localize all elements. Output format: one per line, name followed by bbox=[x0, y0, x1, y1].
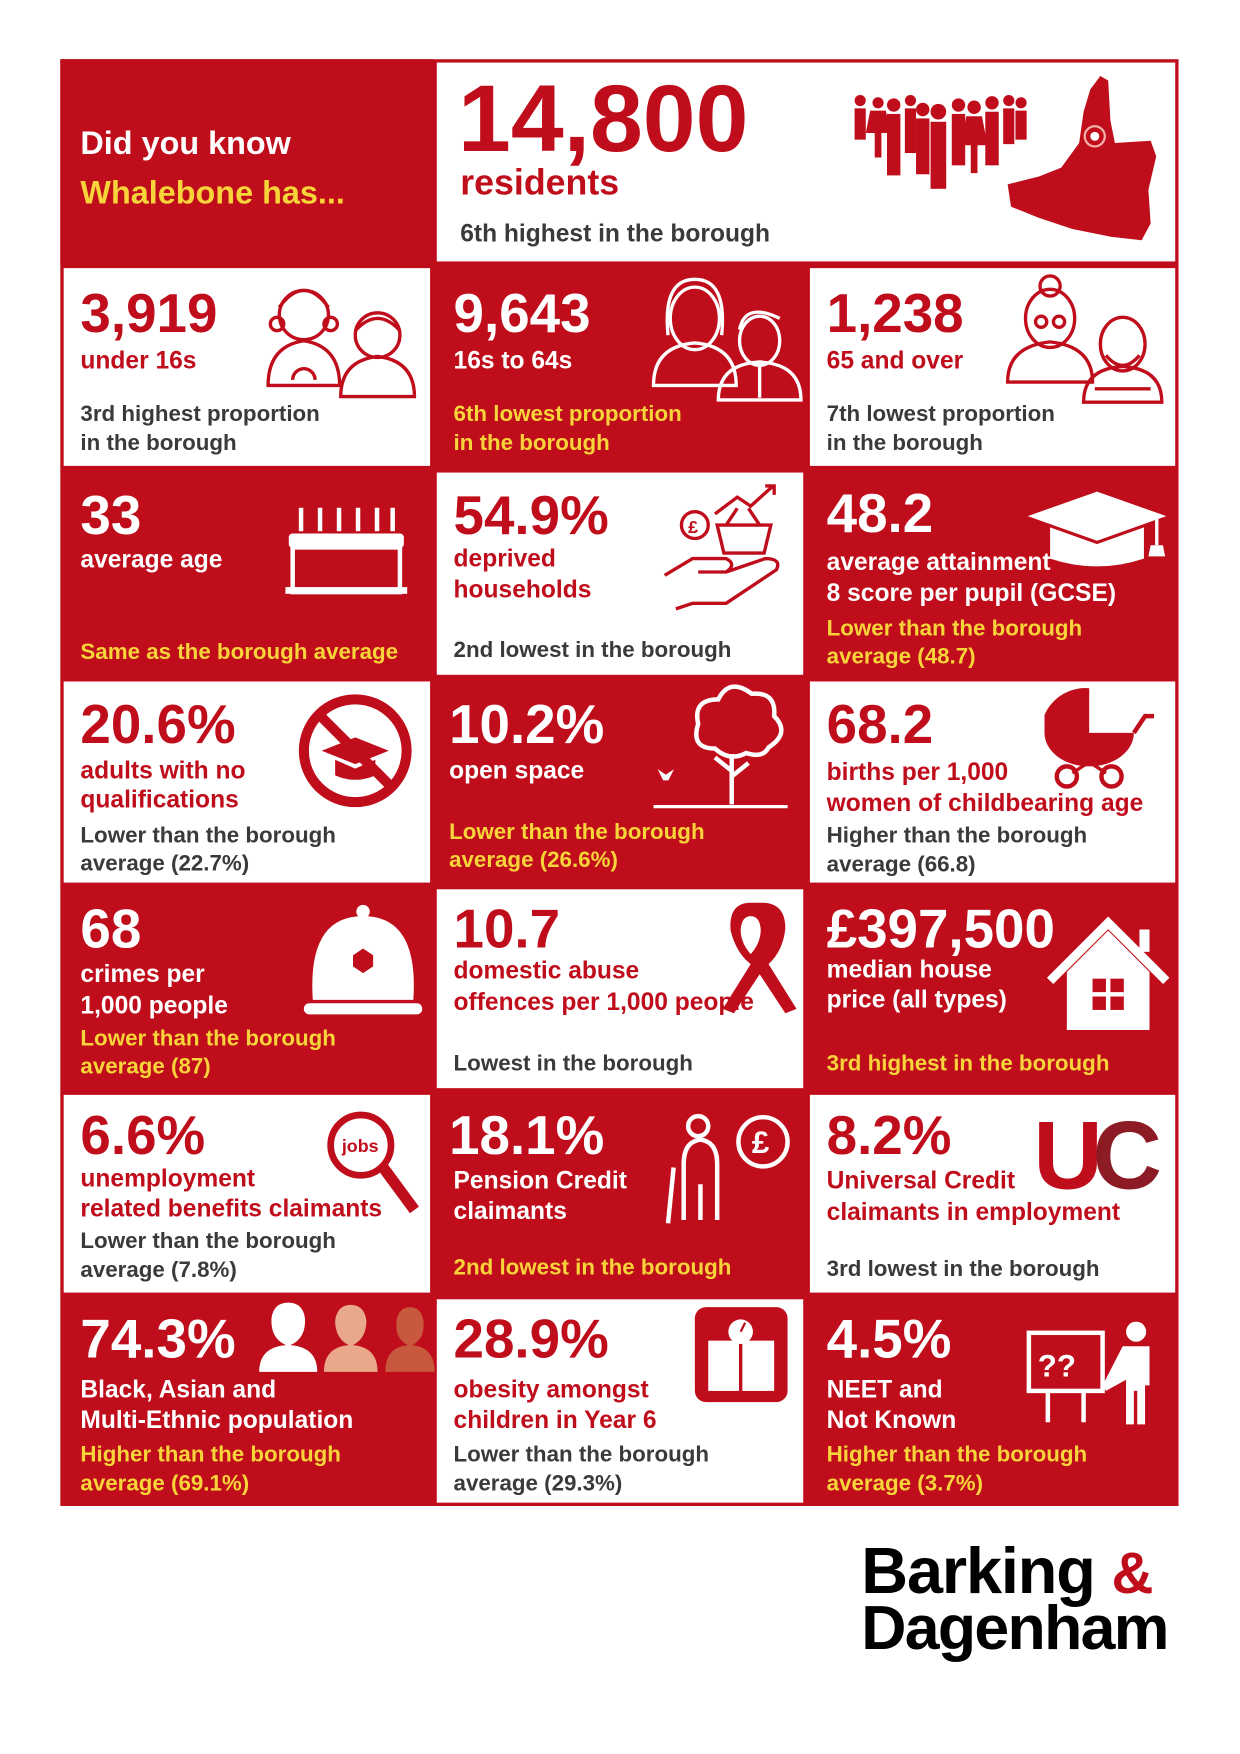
icon: ribbon bbox=[723, 903, 797, 1013]
panel: residents: 14,800 bbox=[458, 66, 748, 172]
panel: crimes bbox=[80, 897, 422, 1079]
panel: domestic abuse: Lowest in the borough bbox=[454, 1050, 693, 1075]
panel: attainment 8 bbox=[827, 482, 1166, 669]
panel: average age: 33 bbox=[80, 484, 141, 546]
panel: domestic abuse: domestic abuse bbox=[454, 958, 639, 985]
panel: crimes: Lower than the borough bbox=[80, 1026, 336, 1051]
panel: ethnicity bbox=[80, 1303, 435, 1495]
panel: no qualifications: Lower than the borough bbox=[80, 822, 336, 847]
panel: deprived households bbox=[437, 473, 803, 675]
panel: average age: Same as the borough average bbox=[80, 639, 398, 664]
panel: no qualifications: adults with no bbox=[80, 758, 246, 785]
icon: house bbox=[1050, 923, 1166, 1030]
icon: basket in hand: £ bbox=[688, 517, 698, 537]
panel: crimes: 1,000 people bbox=[80, 992, 228, 1019]
panel: unemployment: unemployment bbox=[80, 1165, 255, 1192]
panel: unemployment: average (7.8%) bbox=[80, 1257, 237, 1282]
panel: 16s to 64s bbox=[454, 279, 801, 455]
panel: pension credit: claimants bbox=[454, 1198, 567, 1225]
panel: unemployment: Lower than the borough bbox=[80, 1228, 336, 1253]
panel: domestic abuse bbox=[437, 889, 803, 1088]
icon: pensioner with pound bbox=[668, 1116, 788, 1223]
logo: Dagenham bbox=[861, 1593, 1168, 1663]
panel: attainment 8: Lower than the borough bbox=[827, 616, 1082, 641]
panel: pension credit: Pension Credit bbox=[454, 1168, 627, 1195]
panel: open space: open space bbox=[449, 758, 584, 785]
panel: 16s to 64s: 6th lowest proportion bbox=[454, 401, 682, 426]
icon: basket in hand bbox=[665, 486, 778, 609]
icon: people group bbox=[855, 95, 1027, 189]
icon: elderly bbox=[1008, 276, 1162, 402]
panel: ethnicity: Black, Asian and bbox=[80, 1377, 276, 1404]
panel: pension credit: 2nd lowest in the borough bbox=[454, 1255, 731, 1280]
panel: obesity: 28.9% bbox=[454, 1307, 609, 1369]
icon: pram bbox=[1045, 688, 1154, 787]
panel: attainment 8: average attainment bbox=[827, 549, 1051, 576]
panel: house price bbox=[827, 897, 1166, 1075]
panel: attainment 8: average (48.7) bbox=[827, 644, 976, 669]
panel: no qualifications: qualifications bbox=[80, 787, 239, 814]
panel: obesity: obesity amongst bbox=[454, 1377, 649, 1404]
icon: tree bbox=[654, 687, 788, 807]
panel: births: women of childbearing age bbox=[826, 790, 1143, 817]
panel: pension credit bbox=[449, 1104, 788, 1280]
panel: under 16s: in the borough bbox=[80, 430, 237, 455]
panel: NEET: average (3.7%) bbox=[827, 1470, 983, 1495]
icon: scale bbox=[695, 1307, 788, 1402]
panel: ethnicity: 74.3% bbox=[80, 1307, 236, 1369]
icon: pensioner with pound: £ bbox=[752, 1125, 770, 1160]
panel: NEET: 4.5% bbox=[827, 1307, 951, 1369]
panel: universal credit bbox=[810, 1095, 1175, 1293]
panel: NEET: Higher than the borough bbox=[827, 1441, 1087, 1466]
panel: under 16s bbox=[64, 268, 430, 466]
panel: births: average (66.8) bbox=[827, 851, 976, 876]
panel: under 16s: 3,919 bbox=[80, 282, 217, 344]
panel: crimes: crimes per bbox=[80, 961, 205, 988]
panel: house price: 3rd highest in the borough bbox=[827, 1050, 1109, 1075]
panel: 65 and over: 65 and over bbox=[827, 348, 964, 375]
panel: domestic abuse: 10.7 bbox=[454, 897, 560, 959]
panel: NEET: NEET and bbox=[827, 1377, 943, 1404]
panel: universal credit: claimants in employment bbox=[827, 1199, 1120, 1226]
icon: children bbox=[268, 290, 414, 397]
panel: attainment 8: 48.2 bbox=[827, 482, 933, 544]
logo bbox=[861, 1534, 1168, 1663]
panel: 65 and over bbox=[810, 268, 1175, 466]
icon: presenter board bbox=[1029, 1322, 1150, 1424]
panel: crimes: 68 bbox=[80, 897, 141, 959]
panel: NEET bbox=[827, 1307, 1150, 1495]
panel: domestic abuse: offences per 1,000 people bbox=[454, 989, 754, 1016]
icon: police helmet bbox=[304, 905, 422, 1014]
panel: unemployment: related benefits claimants bbox=[80, 1196, 382, 1223]
icon: UC letters bbox=[1033, 1103, 1162, 1210]
panel: average age bbox=[80, 484, 407, 664]
panel: pension credit: 18.1% bbox=[449, 1104, 604, 1166]
icon: cake bbox=[286, 508, 407, 593]
panel: unemployment bbox=[64, 1095, 430, 1293]
panel: open space: average (26.6%) bbox=[449, 847, 618, 872]
icon: faces bbox=[259, 1303, 435, 1372]
panel: births: births per 1,000 bbox=[827, 759, 1008, 786]
panel: obesity: children in Year 6 bbox=[454, 1407, 657, 1434]
panel: universal credit: 8.2% bbox=[827, 1104, 951, 1166]
panel: births bbox=[810, 681, 1175, 883]
panel: 16s to 64s: 9,643 bbox=[454, 282, 591, 344]
panel: obesity: Lower than the borough bbox=[454, 1441, 709, 1466]
panel: intro bbox=[60, 59, 433, 265]
panel: universal credit: Universal Credit bbox=[827, 1168, 1015, 1195]
panel: deprived households: deprived bbox=[454, 545, 556, 572]
panel: unemployment: 6.6% bbox=[80, 1104, 205, 1166]
panel: 65 and over: 1,238 bbox=[827, 282, 964, 344]
panel: residents: 6th highest in the borough bbox=[460, 220, 770, 247]
panel: average age: average age bbox=[80, 547, 222, 574]
panel: residents: residents bbox=[460, 162, 619, 202]
panel: no qualifications bbox=[64, 681, 430, 883]
panel: 65 and over: in the borough bbox=[827, 430, 983, 455]
icon: jobs magnifier: jobs bbox=[341, 1136, 379, 1156]
panel: house price: £397,500 bbox=[827, 897, 1055, 959]
logo: & bbox=[1112, 1541, 1153, 1606]
panel: under 16s: 3rd highest proportion bbox=[80, 401, 320, 426]
icon: presenter board: ?? bbox=[1038, 1348, 1076, 1383]
panel: ethnicity: Multi-Ethnic population bbox=[80, 1407, 353, 1434]
panel: universal credit: 3rd lowest in the borough bbox=[827, 1256, 1100, 1281]
frame background bbox=[60, 59, 1179, 1506]
panel: open space: Lower than the borough bbox=[449, 819, 705, 844]
panel: obesity bbox=[437, 1299, 803, 1503]
panel: attainment 8: 8 score per pupil (GCSE) bbox=[827, 580, 1116, 607]
panel: births: Higher than the borough bbox=[827, 822, 1087, 847]
panel: no qualifications: average (22.7%) bbox=[80, 850, 249, 875]
panel: intro: Did you know bbox=[80, 125, 292, 161]
panel: births: 68.2 bbox=[827, 693, 933, 755]
panel: 65 and over: 7th lowest proportion bbox=[827, 401, 1055, 426]
panel: 16s to 64s: 16s to 64s bbox=[454, 348, 572, 375]
panel: under 16s: under 16s bbox=[80, 348, 196, 375]
panel: obesity: average (29.3%) bbox=[454, 1470, 622, 1495]
icon: no graduation bbox=[304, 699, 407, 802]
panel: house price: median house bbox=[827, 957, 992, 984]
panel: deprived households: 2nd lowest in the borough bbox=[454, 637, 731, 662]
icon: graduation cap bbox=[1028, 492, 1166, 566]
logo: Barking bbox=[861, 1534, 1095, 1607]
icon: UC letters: C bbox=[1093, 1103, 1162, 1210]
panel: ethnicity: Higher than the borough bbox=[80, 1441, 341, 1466]
panel: deprived households: 54.9% bbox=[454, 484, 609, 546]
panel: open space bbox=[449, 687, 788, 872]
panel: no qualifications: 20.6% bbox=[80, 693, 236, 755]
panel: house price: price (all types) bbox=[827, 987, 1007, 1014]
icon: UC letters: U bbox=[1033, 1103, 1097, 1210]
panel: crimes: average (87) bbox=[80, 1054, 211, 1079]
panel: NEET: Not Known bbox=[827, 1407, 956, 1434]
panel: residents bbox=[437, 63, 1175, 261]
panel: deprived households: households bbox=[454, 577, 591, 604]
panel: ethnicity: average (69.1%) bbox=[80, 1470, 249, 1495]
panel: intro: Whalebone has... bbox=[80, 174, 345, 210]
icon: jobs magnifier bbox=[331, 1115, 414, 1210]
panel: open space: 10.2% bbox=[449, 693, 604, 755]
panel: 16s to 64s: in the borough bbox=[454, 430, 610, 455]
icon: borough map bbox=[1008, 76, 1156, 240]
icon: adults bbox=[654, 279, 801, 400]
